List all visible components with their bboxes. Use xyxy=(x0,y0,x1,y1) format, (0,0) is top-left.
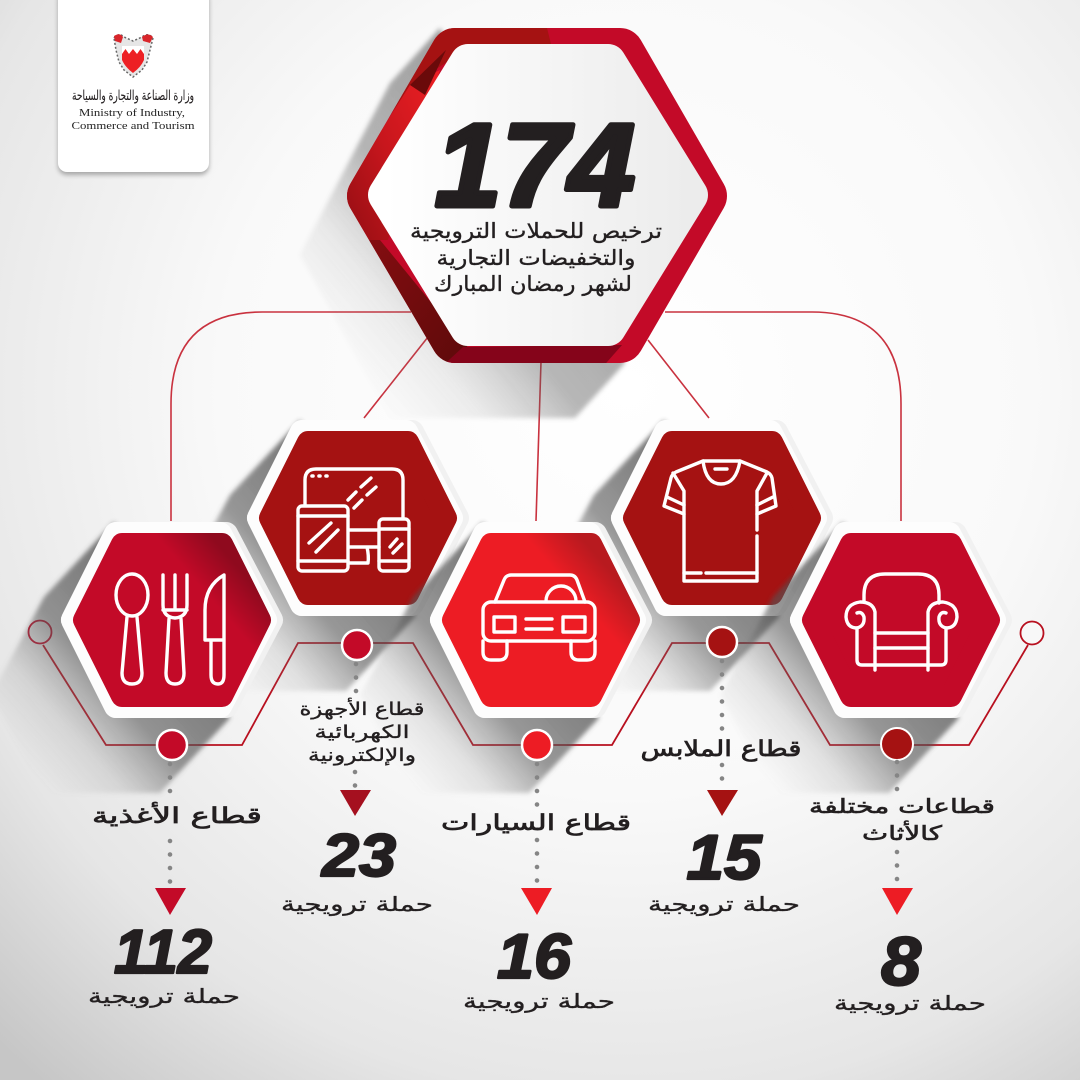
arrows xyxy=(155,790,913,915)
connector lines from main hexagon xyxy=(171,312,901,521)
cars sector: label and count xyxy=(441,811,631,1013)
food sector: label and count: 112 xyxy=(114,918,212,987)
electronics sector: label and count: حملة ترويجية xyxy=(281,892,433,916)
main description xyxy=(410,219,662,296)
node: clothing xyxy=(707,627,737,657)
ministry name in English xyxy=(72,107,195,132)
electronics sector: label and count: والإلكترونية xyxy=(308,745,416,766)
icon: spoon, fork and knife xyxy=(116,574,224,684)
panel: clothing hexagon xyxy=(541,420,821,691)
clothing sector: label and count: 15 xyxy=(686,823,763,893)
node: electronics xyxy=(342,630,372,660)
end ring right xyxy=(1020,622,1044,644)
icon: Bahrain emblem xyxy=(114,34,153,77)
clothing sector: label and count: قطاع الملابس xyxy=(640,737,802,762)
clothing sector: label and count: حملة ترويجية xyxy=(648,892,800,916)
cars sector: label and count: قطاع السيارات xyxy=(441,811,631,836)
icon: t-shirt xyxy=(664,461,776,581)
clothing sector: label and count xyxy=(640,737,802,916)
cars sector: label and count: 16 xyxy=(497,922,572,992)
node: furniture xyxy=(881,728,913,760)
node: food xyxy=(157,730,187,760)
ministry name in English: Ministry of Industry, xyxy=(79,107,185,119)
main description: لشهر رمضان المبارك xyxy=(434,272,632,296)
main hexagon shadow xyxy=(300,28,625,418)
ministry name in English: Commerce and Tourism xyxy=(72,120,195,132)
panel: food hexagon xyxy=(0,522,271,793)
panel: furniture hexagon xyxy=(720,522,1000,793)
main hexagon: total licences xyxy=(340,20,703,370)
furniture sector: label and count: كالأثاث xyxy=(862,821,943,845)
electronics sector: label and count: 23 xyxy=(321,822,396,889)
dotted connectors xyxy=(170,661,897,884)
food sector: label and count: حملة ترويجية xyxy=(88,984,240,1008)
furniture sector: label and count: حملة ترويجية xyxy=(834,991,986,1015)
electronics sector: label and count: الكهربائية xyxy=(314,722,410,743)
node: cars xyxy=(522,730,552,760)
food sector: label and count xyxy=(88,802,262,1008)
panel: cars hexagon xyxy=(360,522,640,793)
end ring left xyxy=(28,620,52,644)
bottom connecting red line xyxy=(43,643,1028,745)
main description: والتخفيضات التجارية xyxy=(436,246,636,270)
ministry name in Arabic: وزارة الصناعة والتجارة والسياحة xyxy=(72,88,194,104)
ministry logo card xyxy=(58,0,209,175)
icon: computer, tablet and phone xyxy=(298,469,409,571)
electronics sector: label and count: قطاع الأجهزة xyxy=(300,698,424,720)
food sector: label and count: قطاع الأغذية xyxy=(92,802,262,829)
electronics sector: label and count xyxy=(281,698,433,916)
panel: electronics hexagon xyxy=(177,420,457,691)
main number 174: 174 xyxy=(435,100,635,232)
cars sector: label and count: حملة ترويجية xyxy=(463,989,615,1013)
furniture sector: label and count xyxy=(809,794,995,1015)
main description: ترخيص للحملات الترويجية xyxy=(410,219,662,243)
icon: armchair xyxy=(846,574,957,670)
icon: car xyxy=(483,575,595,660)
furniture sector: label and count: قطاعات مختلفة xyxy=(809,794,995,818)
furniture sector: label and count: 8 xyxy=(881,923,922,1000)
